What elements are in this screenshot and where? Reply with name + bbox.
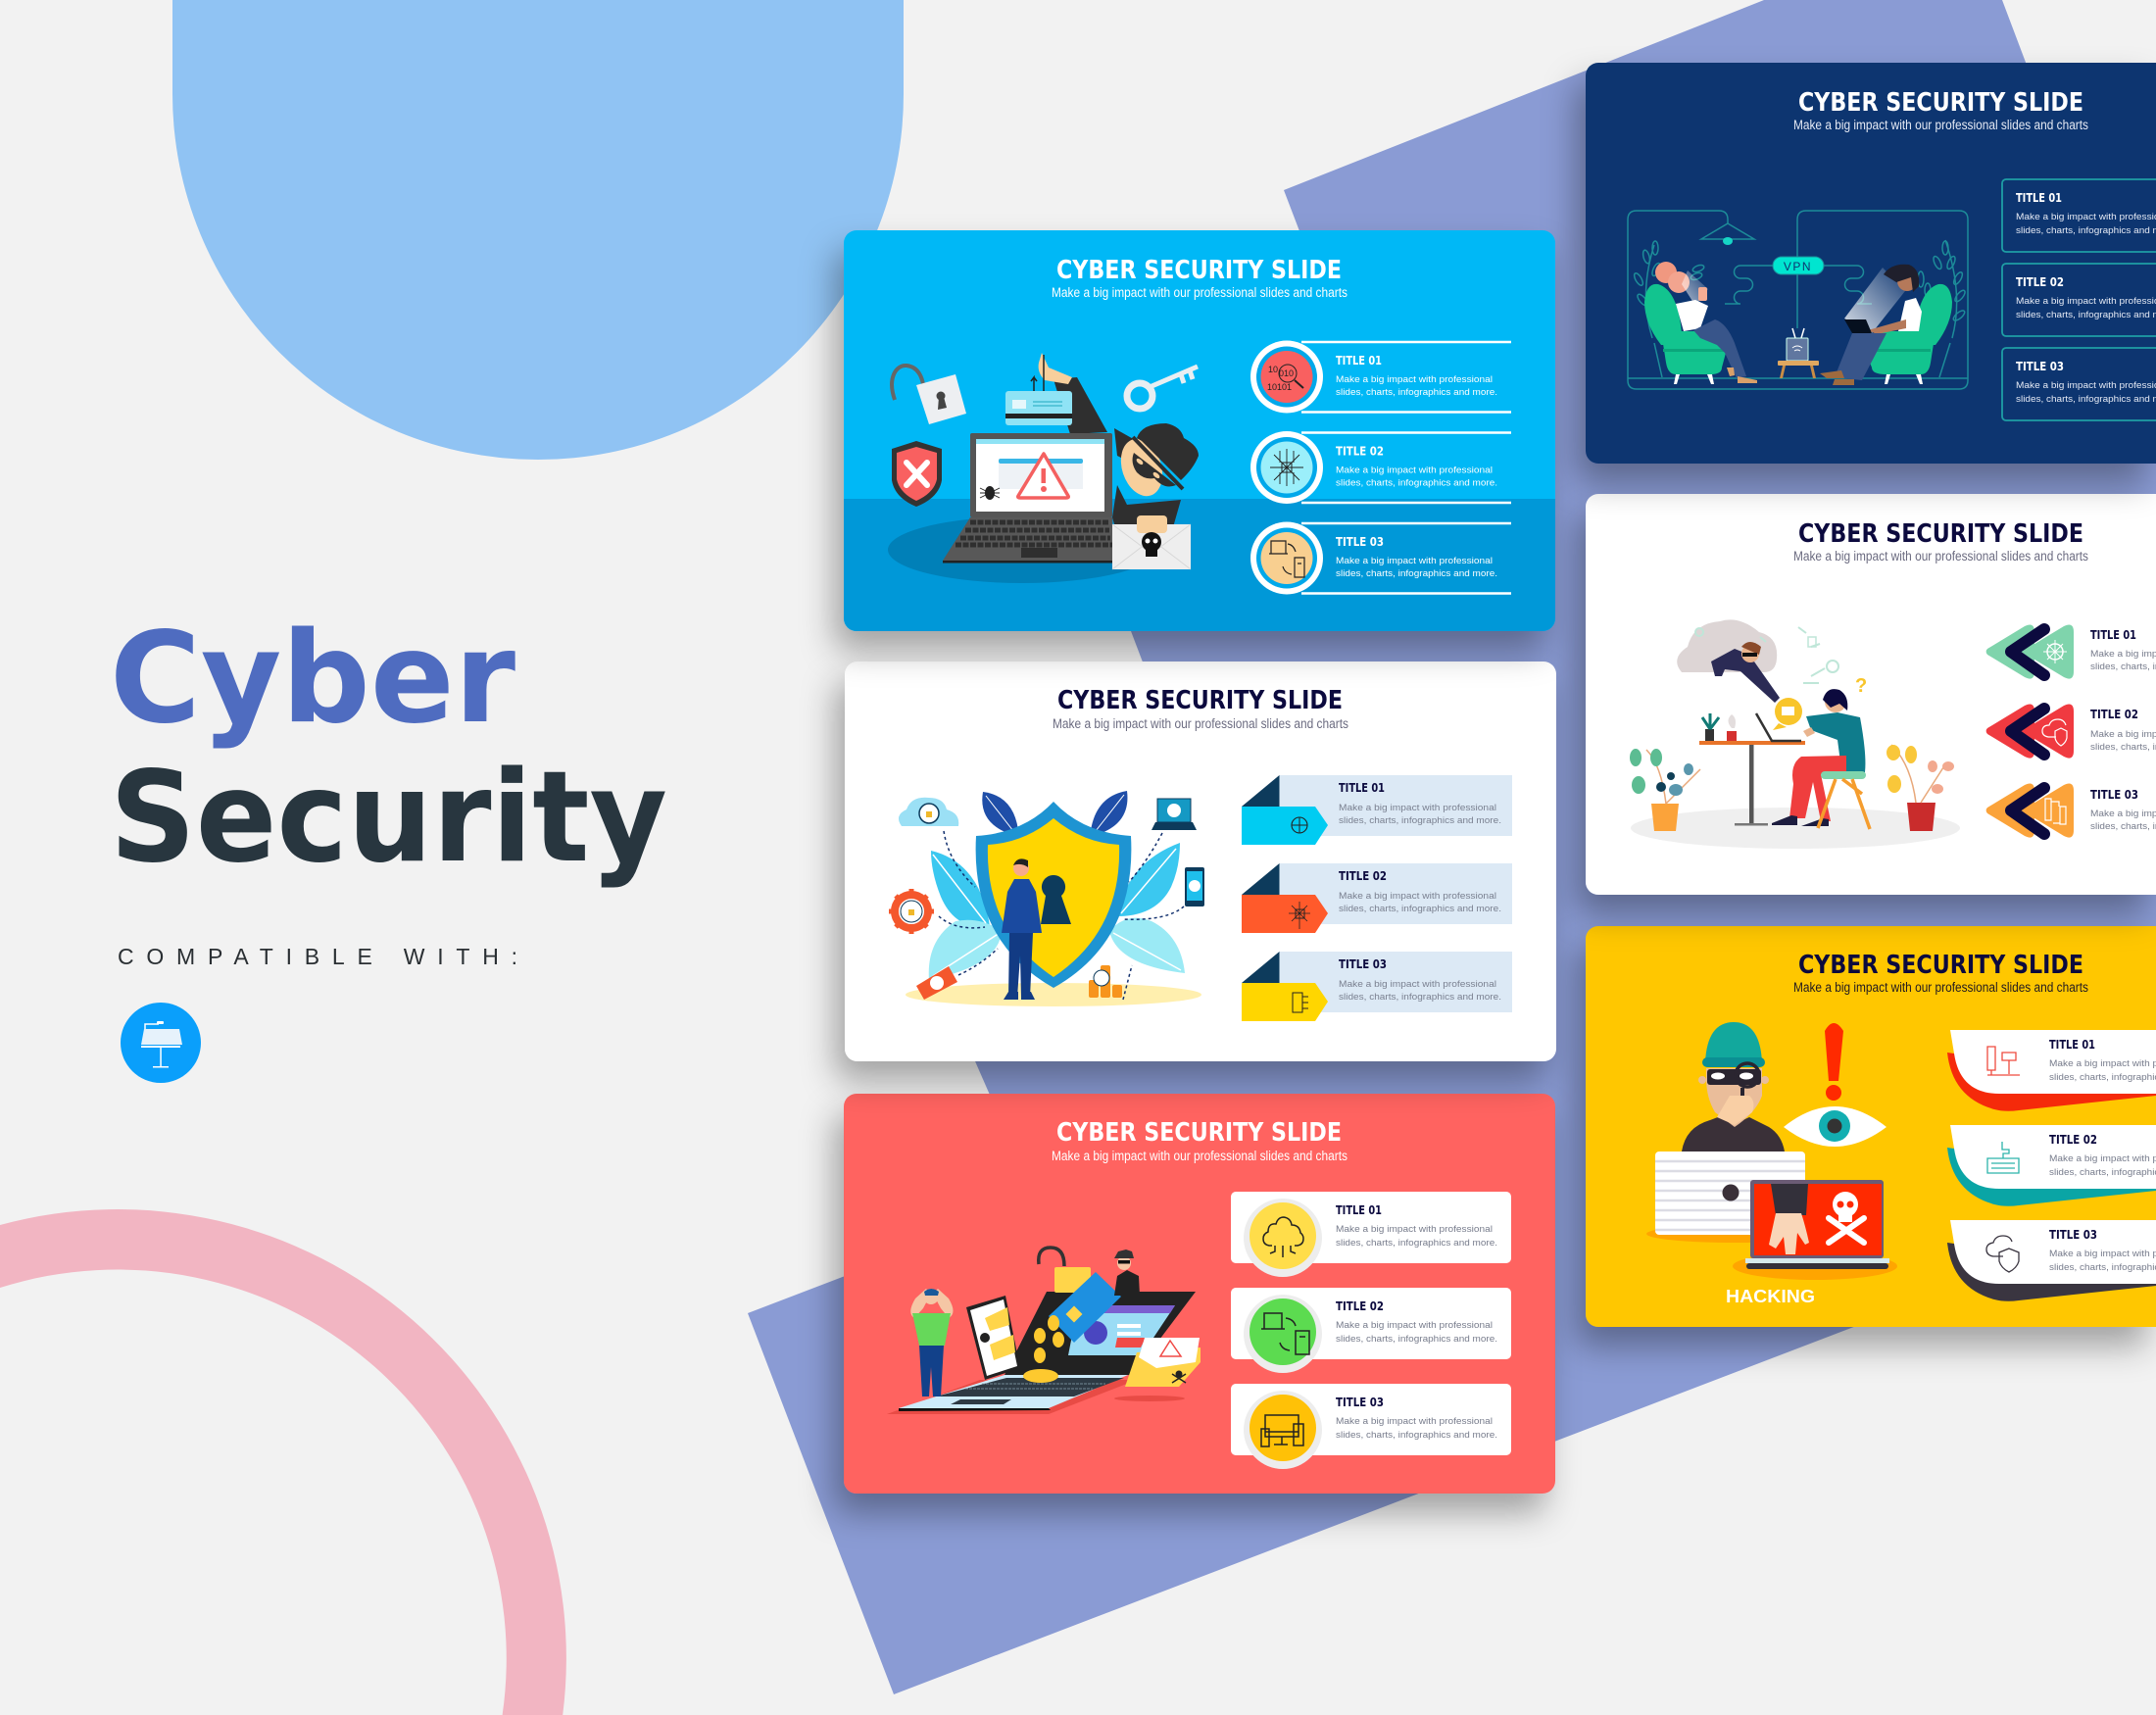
item: title 02 (1947, 1125, 2156, 1206)
item: title 03: Make a big impact with professional (1339, 979, 1496, 990)
item: title 01: TITLE 01 (1339, 781, 1385, 795)
cloud lock (899, 798, 958, 826)
credit card (1049, 1272, 1121, 1343)
hacking caption: HACKING (1726, 1287, 1815, 1306)
item: title 03: slides, charts, infographics and more. (1339, 992, 1501, 1003)
heading: CYBER SECURITY SLIDE (1056, 256, 1342, 285)
panel: white shield slide (845, 662, 1556, 1061)
item: title 02: Make a big impact with professional (1339, 891, 1496, 902)
item: title 03 (2002, 348, 2156, 420)
skull and crossbones (1829, 1192, 1864, 1243)
item: title 01: 10101 (1267, 382, 1292, 392)
item: title 01 (1986, 624, 2156, 679)
item: title 02 (1986, 704, 2156, 759)
item: title 02: TITLE 02 (2049, 1133, 2097, 1147)
heading: CYBER SECURITY SLIDE (1057, 686, 1343, 715)
item: title 03: TITLE 03 (1339, 957, 1387, 971)
phishing illustration (1630, 619, 1960, 849)
laptop (1152, 799, 1197, 830)
coins (1023, 1315, 1064, 1383)
laptop (899, 1292, 1196, 1411)
item: title 01: Make a big impact with professional (1336, 374, 1493, 385)
phone (966, 1296, 1020, 1380)
gear (889, 889, 935, 935)
leaves (929, 791, 1185, 980)
subheading: Make a big impact with our professional slides and charts (1793, 549, 2088, 564)
cloud with hacker (1677, 619, 1838, 703)
item: title 02: slides, charts, infographics and more. (1339, 904, 1501, 914)
heading: CYBER SECURITY SLIDE (1798, 951, 2083, 980)
decorative periwinkle tilted shape (748, 0, 2156, 1694)
item: title 03 (1231, 1384, 1511, 1469)
vpn illustration (1628, 211, 1968, 389)
item: title 03: Make a big impact with professional (1336, 556, 1493, 566)
panel: yellow hacking slide (1586, 926, 2156, 1327)
item: title 01: 010 (1279, 368, 1294, 378)
decorative pink ring (0, 1209, 566, 1715)
item: title 01 (1947, 1030, 2156, 1111)
item: title 03 (1986, 783, 2156, 838)
item: title 01 (1250, 341, 1511, 414)
item: title 03: TITLE 03 (2090, 788, 2138, 802)
room outlines (1628, 211, 1968, 389)
coins (1089, 965, 1122, 998)
item: title 03: slides, charts, infographics and more. (1336, 1430, 1497, 1441)
item: title 01: 10 (1268, 365, 1278, 374)
item: title 01: TITLE 01 (2090, 628, 2136, 642)
compatible with label: COMPATIBLE WITH: (118, 944, 517, 969)
subheading: Make a big impact with our professional slides and charts (1052, 285, 1348, 300)
item: title 01: Make a big impact with professional (1339, 803, 1496, 813)
skull envelope (1112, 515, 1191, 569)
item: title 03: Make a big impact with professional (1336, 1416, 1493, 1427)
seated man (1772, 675, 1870, 829)
envelope (1125, 1338, 1200, 1387)
item: title 02: Make a big impact with professional (1336, 465, 1493, 476)
person (1002, 858, 1042, 1000)
router on table (1778, 328, 1819, 378)
seated man: ? (1855, 675, 1867, 697)
open padlock (892, 366, 966, 424)
left plant (1630, 749, 1700, 831)
lock (1039, 1248, 1091, 1293)
item: title 02: TITLE 02 (2016, 275, 2064, 289)
panel: white phishing slide (1586, 494, 2156, 895)
main title: Security (110, 745, 667, 891)
key (1127, 367, 1198, 409)
item: title 01: TITLE 01 (2016, 191, 2062, 205)
keyhole (1041, 875, 1071, 924)
item: title 02 (2002, 264, 2156, 336)
phone (1185, 867, 1204, 906)
item: title 02: TITLE 02 (1336, 1299, 1384, 1313)
yellow email bubble (1773, 698, 1802, 730)
item: title 02: TITLE 02 (2090, 708, 2138, 721)
icon: keynote (121, 1003, 201, 1083)
vpn badge: VPN (1784, 260, 1812, 273)
laptop attack illustration (887, 1248, 1200, 1414)
item: title 02 (1242, 863, 1512, 933)
item: title 03: TITLE 03 (1336, 535, 1384, 549)
item: title 02 (1231, 1288, 1511, 1373)
item: title 03 (1250, 521, 1511, 594)
person (910, 1289, 953, 1396)
hacker (1114, 1250, 1140, 1296)
heading: CYBER SECURITY SLIDE (1798, 88, 2083, 118)
heading: CYBER SECURITY SLIDE (1056, 1118, 1342, 1148)
item: title 01 (1231, 1192, 1511, 1277)
man in armchair (1820, 265, 1952, 385)
item: title 03: TITLE 03 (1336, 1396, 1384, 1409)
vpn badge (1773, 257, 1824, 274)
arm with hook and credit card (1005, 353, 1107, 434)
red shield (892, 441, 942, 507)
subheading: Make a big impact with our professional slides and charts (1793, 980, 2088, 995)
item: title 01: TITLE 01 (1336, 354, 1382, 368)
item: title 01 (2002, 179, 2156, 252)
item: title 01: TITLE 01 (1336, 1203, 1382, 1217)
laptop with warning (943, 433, 1115, 563)
shield illustration (889, 791, 1204, 1006)
item: title 02: slides, charts, infographics and more. (1336, 478, 1497, 488)
item: title 01: Make a big impact with professional (1336, 1224, 1493, 1235)
woman in armchair (1644, 262, 1757, 384)
panel: blue hacker slide (844, 230, 1555, 631)
panel: coral slide (844, 1094, 1555, 1494)
item: title 01: slides, charts, infographics and more. (1336, 1238, 1497, 1249)
subheading: Make a big impact with our professional slides and charts (1053, 716, 1348, 731)
item: title 02: slides, charts, infographics and more. (1336, 1334, 1497, 1345)
item: title 02: Make a big impact with professional (1336, 1320, 1493, 1331)
item: title 03 (1947, 1220, 2156, 1301)
item: title 02: TITLE 02 (1339, 869, 1387, 883)
hacker illustration (888, 353, 1199, 583)
item: title 02 (1250, 431, 1511, 504)
right plant (1886, 745, 1954, 831)
shield (976, 802, 1131, 988)
subheading: Make a big impact with our professional slides and charts (1052, 1149, 1348, 1163)
item: title 01: TITLE 01 (2049, 1038, 2095, 1052)
dashed branches (939, 831, 1184, 1000)
item: title 01: slides, charts, infographics and more. (1339, 815, 1501, 826)
table with laptop and plant (1699, 713, 1805, 825)
item: title 03: TITLE 03 (2016, 360, 2064, 373)
heading: CYBER SECURITY SLIDE (1798, 519, 2083, 549)
main title (110, 606, 667, 891)
hacker illustration (1646, 1022, 1897, 1280)
exclamation mark and eye (1784, 1023, 1886, 1147)
main title: Cyber (110, 606, 515, 752)
item: title 02: TITLE 02 (1336, 445, 1384, 459)
red envelope (916, 966, 957, 1000)
decorative light blue arch (172, 0, 904, 460)
item: title 03: TITLE 03 (2049, 1228, 2097, 1242)
item: title 01 (1242, 775, 1512, 845)
item: title 01: slides, charts, infographics and more. (1336, 387, 1497, 398)
subheading: Make a big impact with our professional slides and charts (1793, 118, 2088, 132)
item: title 03: slides, charts, infographics and more. (1336, 568, 1497, 579)
panel: navy vpn slide (1586, 63, 2156, 464)
hacker (1112, 423, 1199, 534)
item: title 03 (1242, 952, 1512, 1021)
